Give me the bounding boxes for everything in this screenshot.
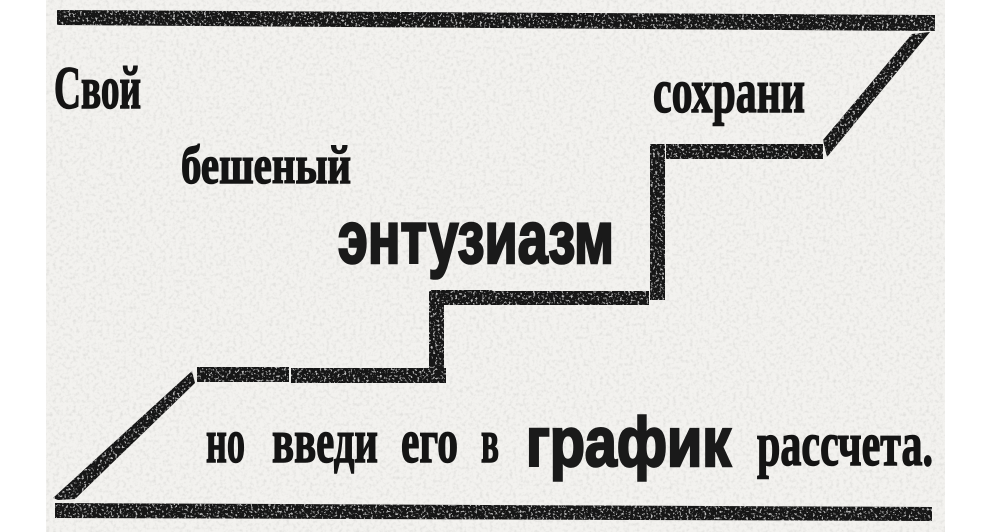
upper vertical step xyxy=(650,144,665,300)
text: Свой: Свой xyxy=(54,55,141,121)
lower horizontal step left part xyxy=(197,367,289,382)
text: энтузиазм: энтузиазм xyxy=(338,196,614,279)
text: но введи его в xyxy=(206,408,499,476)
middle horizontal step xyxy=(431,290,649,305)
lower horizontal step right part xyxy=(291,368,446,383)
text: но введи его в: но xyxy=(206,408,245,476)
text: сохрани: сохрани xyxy=(653,58,805,126)
text: но введи его в: его xyxy=(401,408,458,476)
bottom left diagonal segment xyxy=(53,371,195,500)
top bar xyxy=(57,10,935,31)
text: но введи его в: введи xyxy=(272,408,378,476)
bottom bar xyxy=(55,503,932,521)
lower vertical step xyxy=(429,291,444,368)
text: бешеный: бешеный xyxy=(181,135,351,195)
text: но введи его в: в xyxy=(481,408,499,476)
text: график: график xyxy=(526,403,732,481)
top right diagonal segment xyxy=(823,32,930,157)
upper horizontal step xyxy=(666,144,823,159)
stepped line graph xyxy=(53,32,930,500)
